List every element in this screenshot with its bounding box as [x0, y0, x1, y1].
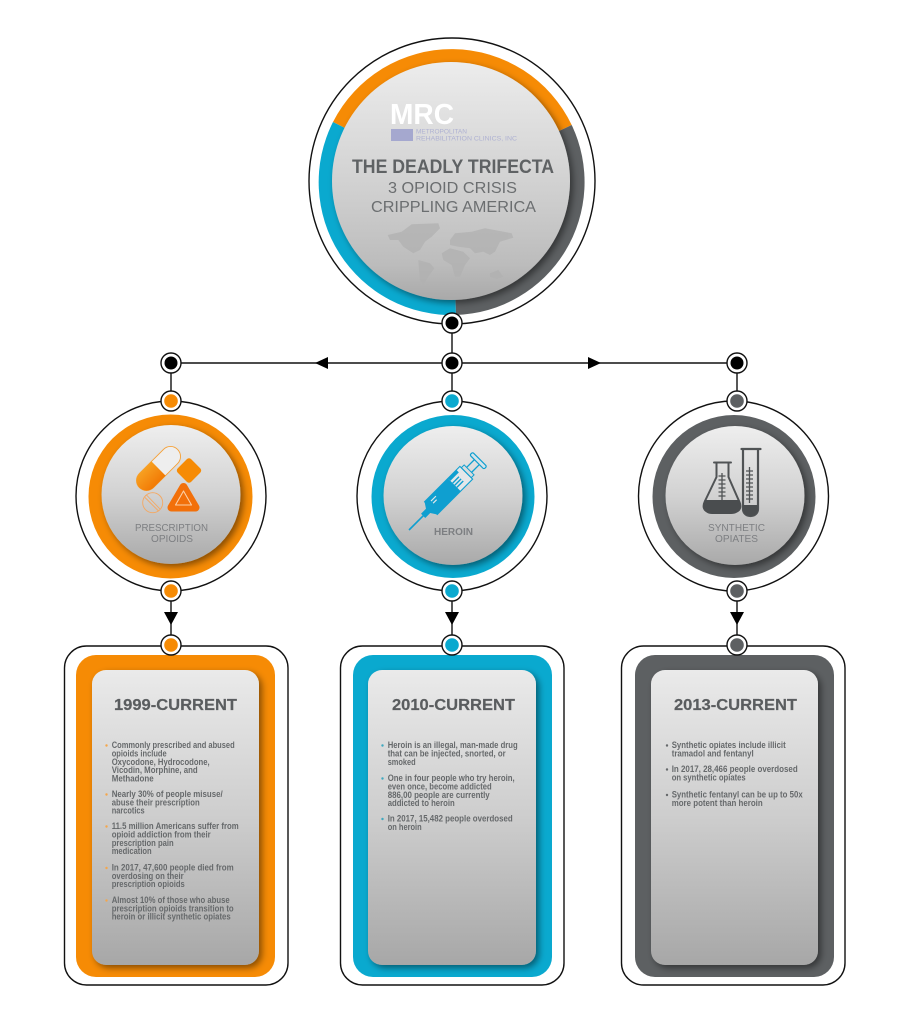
round tablet — [143, 493, 163, 513]
arrow: right — [588, 357, 601, 369]
arrow: down middle — [445, 612, 459, 625]
logo: MRC — [390, 99, 518, 142]
bullets — [105, 744, 108, 902]
bullet text: that can be injected, snorted, or — [388, 748, 506, 758]
bullet text: medication — [112, 846, 152, 856]
bullet text: 11.5 million Americans suffer from — [112, 821, 239, 831]
bullet text: overdosing on their — [112, 871, 184, 881]
panel: synthetic opiates circle — [638, 401, 828, 591]
bullets — [666, 744, 668, 796]
logo wordmark: MRC — [390, 99, 454, 131]
flask scale — [718, 473, 726, 500]
bullet text: Synthetic fentanyl can be up to 50x — [672, 790, 803, 800]
bullet text: Heroin is an illegal, man-made drug — [388, 740, 518, 750]
bullet text: In 2017, 28,466 people overdosed — [672, 764, 798, 774]
flask liquid — [703, 500, 741, 514]
diamond pill — [176, 457, 202, 484]
bullet text: opioids include — [112, 748, 167, 758]
icon: syringe — [402, 452, 487, 537]
bullets — [381, 744, 384, 820]
bullet text: Oxycodone, Hydrocodone, — [112, 757, 210, 767]
triangle pill — [172, 487, 196, 508]
icon: pills — [132, 442, 202, 513]
heading: 2013-CURRENT — [674, 697, 798, 714]
bullet text: on synthetic opiates — [672, 772, 746, 782]
tube scale — [746, 467, 753, 503]
bullet text: Almost 10% of those who abuse — [112, 895, 230, 905]
bullet text: 886,00 people are currently — [388, 790, 490, 800]
bullet text: addicted to heroin — [388, 798, 455, 808]
subtitle line 2: CRIPPLING AMERICA — [371, 199, 537, 216]
label: SYNTHETIC — [708, 522, 765, 534]
logo name: METROPOLITAN — [416, 130, 467, 136]
bullet text: In 2017, 15,482 people overdosed — [388, 814, 513, 824]
bullet text: prescription opioids transition to — [112, 904, 234, 914]
label: HEROIN — [434, 526, 473, 538]
icon: lab glassware — [703, 449, 760, 516]
bullet text: prescription pain — [112, 838, 174, 848]
title: THE DEADLY TRIFECTA — [352, 157, 554, 178]
heading: 1999-CURRENT — [114, 697, 238, 714]
subtitle line 1: 3 OPIOID CRISIS — [388, 180, 517, 197]
connector lines — [171, 333, 737, 645]
bullet text: on heroin — [388, 822, 422, 832]
bullet text: abuse their prescription — [112, 797, 200, 807]
bullet text — [112, 740, 239, 922]
connector nodes: orange — [161, 391, 181, 655]
panel: card 1999-current — [64, 646, 288, 985]
bullet text: One in four people who try heroin, — [388, 773, 515, 783]
ring segment: blue — [319, 122, 456, 315]
arrow: down right — [730, 612, 744, 625]
panel: heroin circle — [357, 401, 547, 591]
bullet text: heroin or illicit synthetic opiates — [112, 912, 231, 922]
bullet text — [388, 740, 518, 832]
ring segment: gray — [452, 125, 585, 315]
capsule — [132, 442, 185, 495]
arrow: left — [315, 357, 328, 369]
flask — [704, 462, 740, 512]
bullet text: opioid addiction from their — [112, 830, 211, 840]
label line 2: OPIOIDS — [151, 533, 193, 545]
bullet text: prescription opioids — [112, 879, 185, 889]
test tube — [742, 449, 760, 516]
bullet text: Commonly prescribed and abused — [112, 740, 235, 750]
bullet text: smoked — [388, 757, 416, 767]
bullet text: even once, become addicted — [388, 782, 492, 792]
connector nodes: black — [161, 313, 747, 373]
logo block — [391, 129, 413, 141]
bullet text: Vicodin, Morphine, and — [112, 765, 198, 775]
inner disc — [332, 62, 570, 300]
arrow: down left — [164, 612, 178, 625]
bullet text: narcotics — [112, 806, 145, 816]
bullet text: Nearly 30% of people misuse/ — [112, 789, 223, 799]
panel: prescription opioids circle — [76, 401, 266, 591]
bullet text: Synthetic opiates include illicit — [672, 740, 786, 750]
panel: card 2010-current — [340, 646, 564, 985]
world map — [388, 223, 513, 285]
panel: card 2013-current — [622, 646, 845, 985]
label line 2: OPIATES — [715, 533, 758, 545]
bullet text: tramadol and fentanyl — [672, 748, 754, 758]
connector nodes: gray — [727, 391, 747, 655]
bullet text: Methadone — [112, 774, 154, 784]
label: PRESCRIPTION — [135, 522, 208, 534]
tube liquid — [743, 505, 758, 516]
bullet text: In 2017, 47,600 people died from — [112, 863, 234, 873]
heading: 2010-CURRENT — [392, 697, 516, 714]
bullet text — [672, 740, 803, 808]
top circle: the deadly trifecta — [309, 38, 595, 324]
connector nodes: blue — [442, 391, 462, 655]
logo name second line: REHABILITATION CLINICS, INC — [416, 136, 518, 142]
ring segment: orange — [333, 49, 572, 182]
bullet text: more potent than heroin — [672, 798, 763, 808]
